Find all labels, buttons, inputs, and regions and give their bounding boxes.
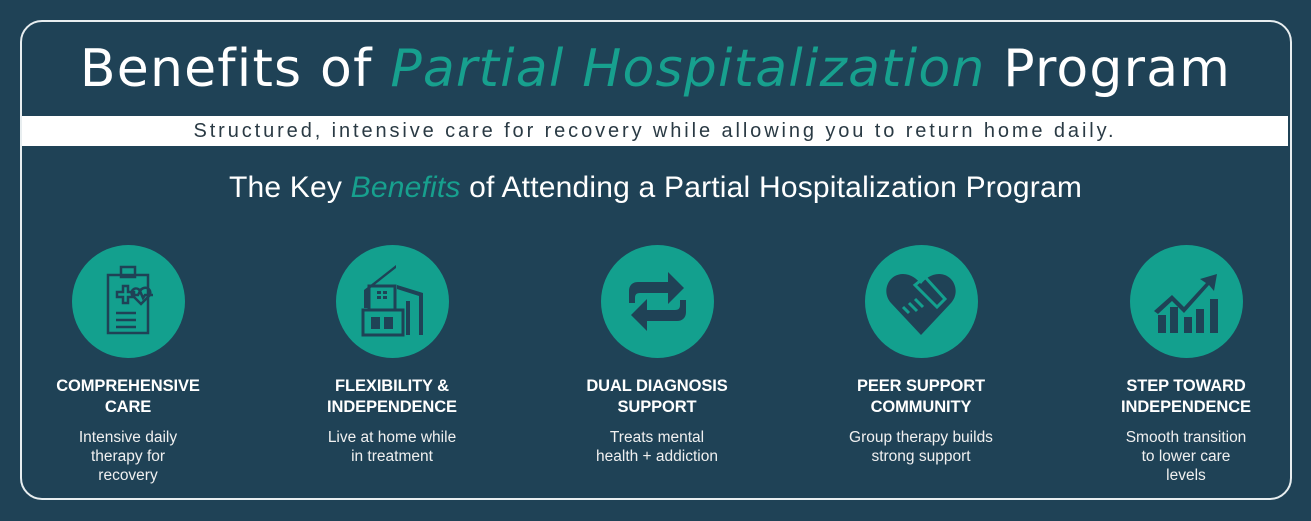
text: flexibility: Live at home while xyxy=(328,429,456,446)
icon: clipboard xyxy=(72,245,185,358)
section heading: The Key Benefits of Attending a Partial Hospitalization Program xyxy=(229,171,1082,204)
text: flexibility xyxy=(328,429,456,465)
icon: growth chart xyxy=(1130,245,1243,358)
label: comprehensive care: CARE xyxy=(105,398,151,416)
label: step toward independence xyxy=(1121,377,1251,416)
title: Benefits of Partial Hospitalization Program xyxy=(80,39,1231,99)
text: dual diagnosis xyxy=(596,429,718,465)
text: peer support xyxy=(849,429,993,465)
text: dual diagnosis: health + addiction xyxy=(596,448,718,465)
text: peer support: Group therapy builds xyxy=(849,429,993,446)
label: flexibility xyxy=(327,377,457,416)
text: step toward independence: Smooth transition xyxy=(1126,429,1246,446)
label: peer support: PEER SUPPORT xyxy=(857,377,985,395)
text: dual diagnosis: Treats mental xyxy=(610,429,704,446)
label: comprehensive care xyxy=(56,377,200,416)
label: step toward independence: INDEPENDENCE xyxy=(1121,398,1251,416)
text: flexibility: in treatment xyxy=(351,448,433,465)
subtitle band xyxy=(22,116,1288,146)
label: flexibility: INDEPENDENCE xyxy=(327,398,457,416)
text: step toward independence xyxy=(1126,429,1246,484)
subtitle band: Structured, intensive care for recovery while allowing you to return home daily. xyxy=(193,120,1117,142)
icon: heart handshake xyxy=(865,245,978,358)
label: dual diagnosis xyxy=(586,377,728,416)
icon: arrows xyxy=(601,245,714,358)
icon: building xyxy=(336,245,449,358)
text: comprehensive care: therapy for xyxy=(91,448,165,465)
label: dual diagnosis: DUAL DIAGNOSIS xyxy=(586,377,728,395)
text: comprehensive care xyxy=(79,429,178,484)
text: comprehensive care: Intensive daily xyxy=(79,429,177,446)
label: peer support: COMMUNITY xyxy=(871,398,971,416)
text: step toward independence: to lower care xyxy=(1142,448,1230,465)
label: step toward independence: STEP TOWARD xyxy=(1126,377,1246,395)
label: dual diagnosis: SUPPORT xyxy=(617,398,697,416)
text: peer support: strong support xyxy=(871,448,971,465)
label: flexibility: FLEXIBILITY & xyxy=(335,377,449,395)
text: step toward independence: levels xyxy=(1166,467,1206,484)
label: comprehensive care: COMPREHENSIVE xyxy=(56,377,200,395)
label: peer support xyxy=(857,377,985,416)
text: comprehensive care: recovery xyxy=(98,467,158,484)
